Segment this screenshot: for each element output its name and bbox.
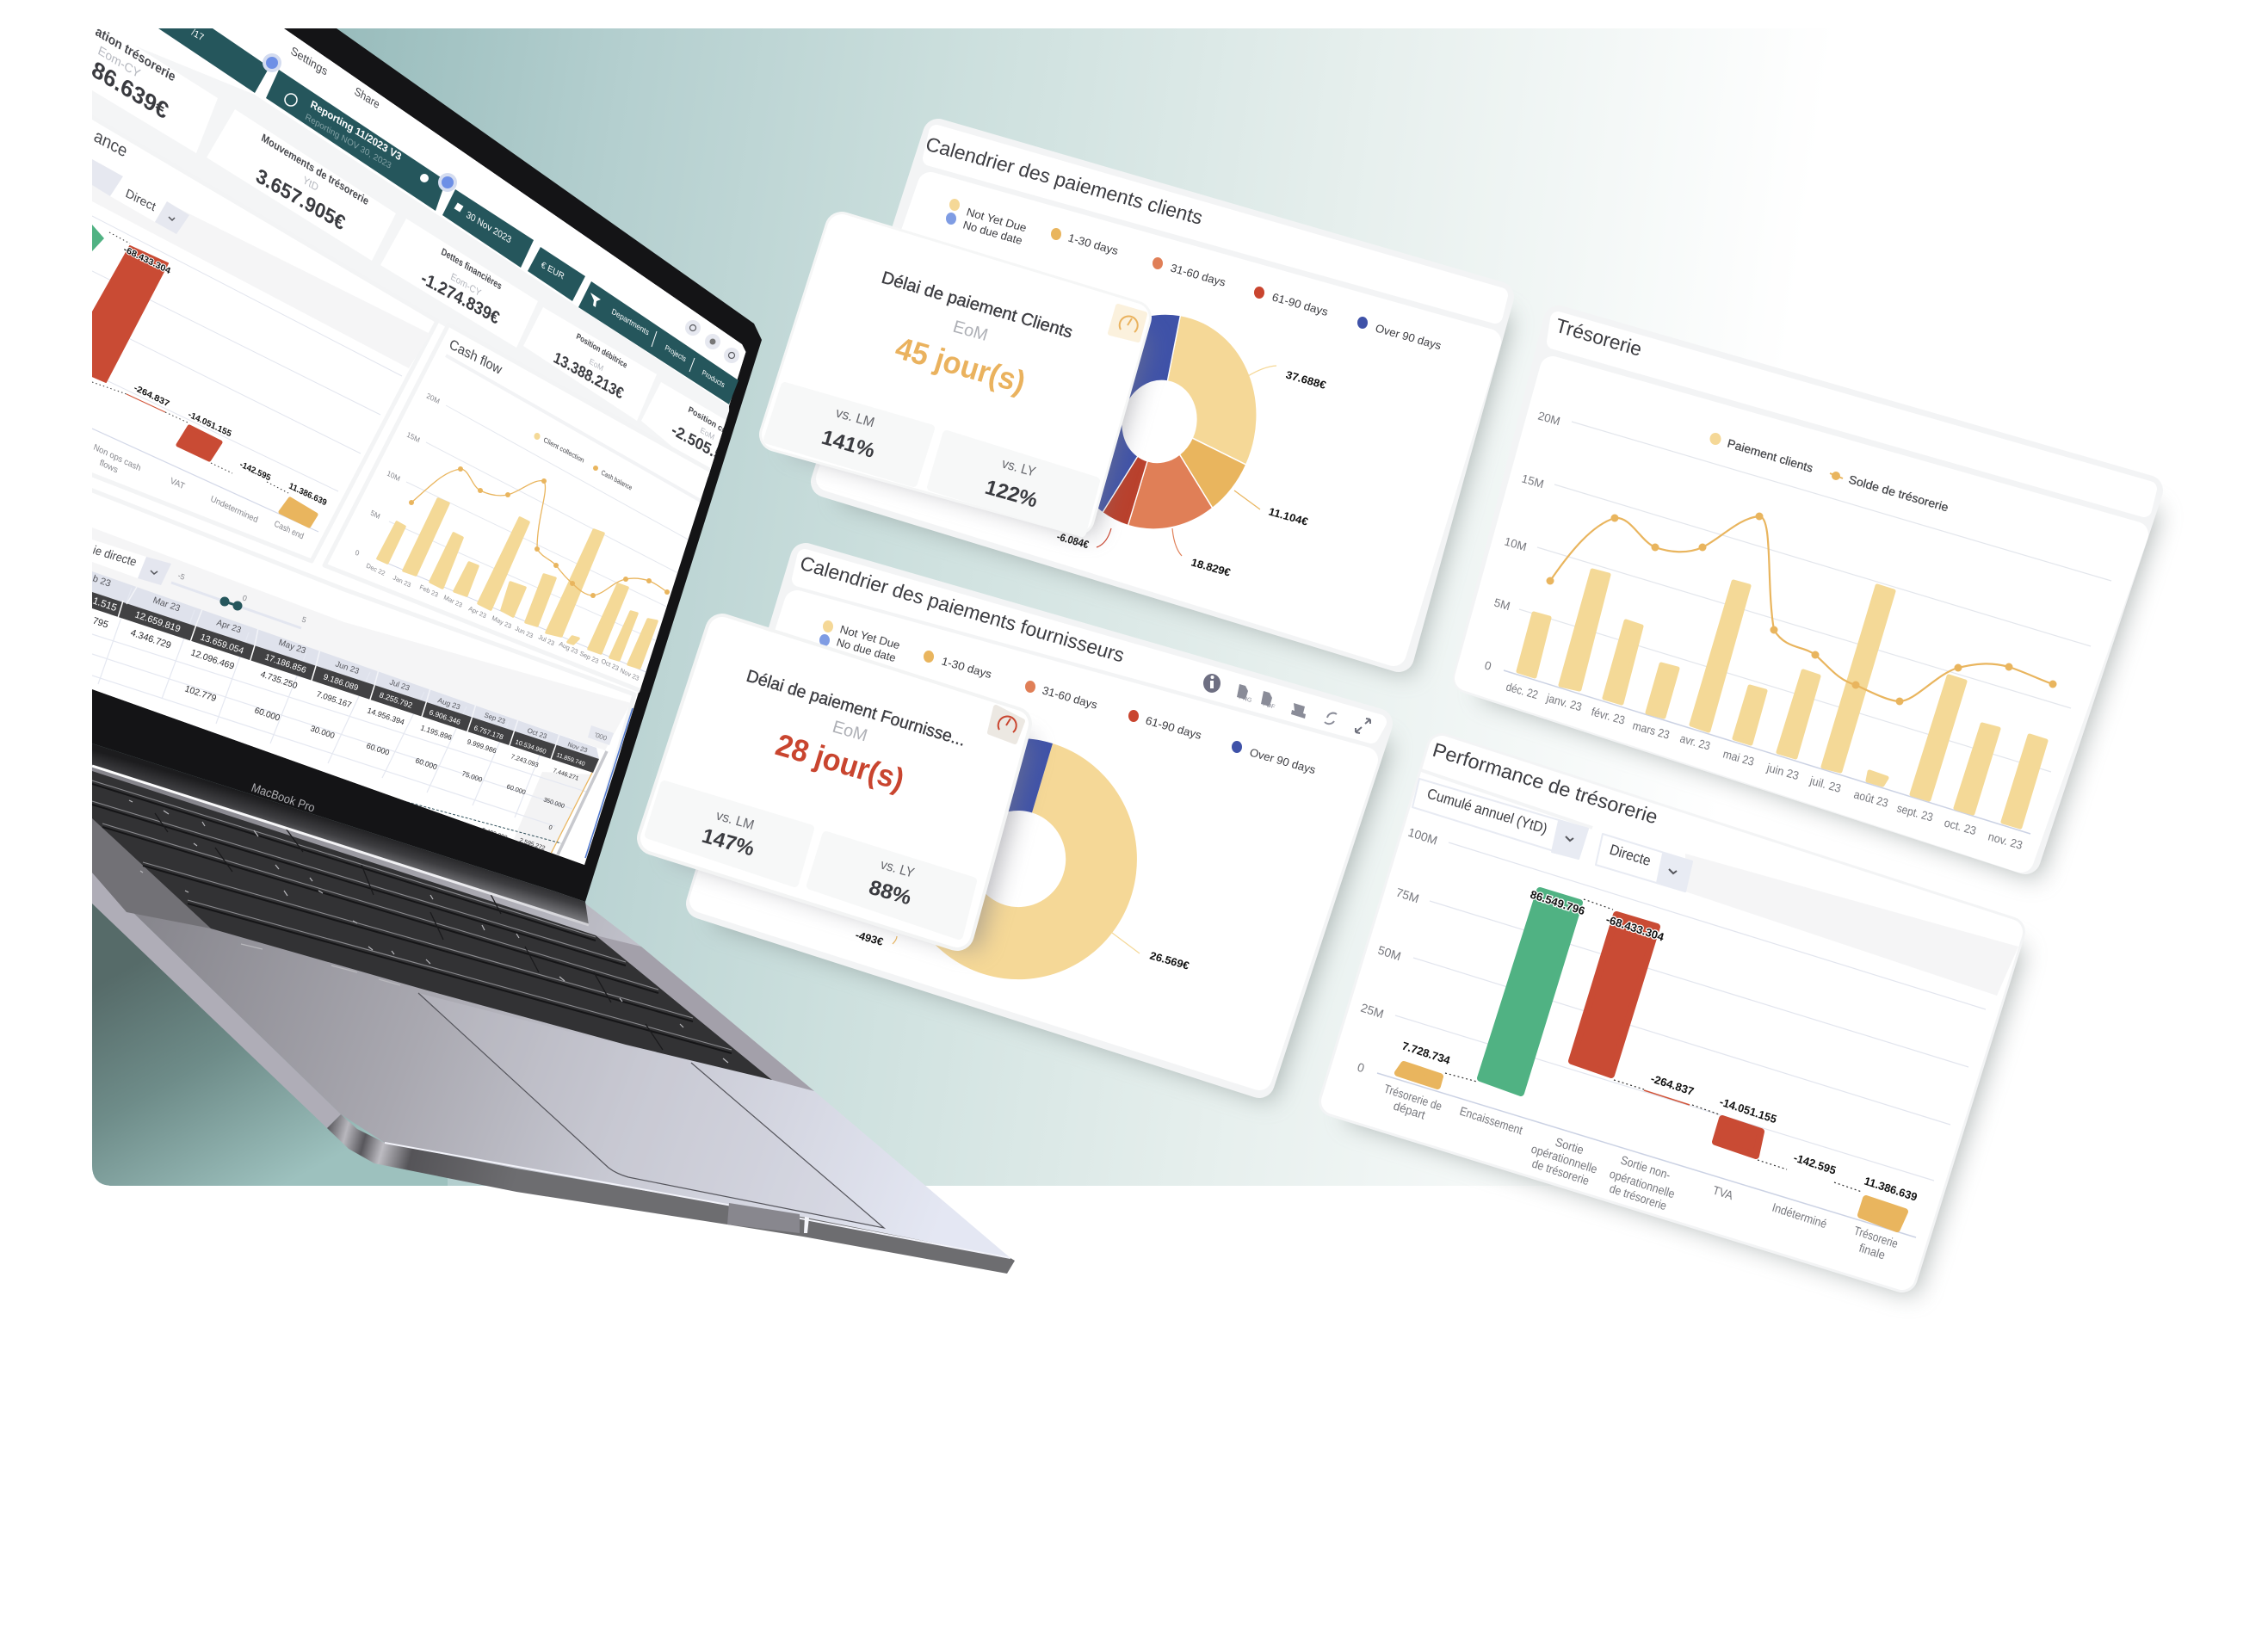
- data table in laptop: 75.000: [460, 769, 484, 784]
- data table in laptop: 795: [91, 616, 109, 631]
- data table in laptop: 2.492.092: [480, 827, 508, 842]
- dropdown: Directe: [1596, 834, 1692, 891]
- waterfall chart: de trésorerie: [1608, 1181, 1668, 1212]
- waterfall panel in laptop: -14.051.155: [187, 410, 233, 440]
- KPI card: mouvements: Mouvements de trésorerie: [260, 132, 370, 208]
- data table in laptop: May 23: [277, 638, 307, 657]
- KPI row background: [92, 28, 732, 490]
- data table in laptop: Oct 23: [526, 726, 548, 741]
- background dark corner: [92, 861, 448, 1186]
- donut labels: clients: -6.084€: [1055, 530, 1091, 551]
- line and bar chart: trésorerie: [1483, 409, 2111, 852]
- donut labels: clients: [1055, 366, 1327, 579]
- data table in laptop: Jun 23: [334, 659, 361, 676]
- infographic scene: [92, 28, 2169, 1305]
- cash flow chart in laptop: 5M: [369, 508, 381, 521]
- waterfall chart: 25M: [1359, 1001, 1386, 1021]
- stat: vs LM: [649, 785, 810, 883]
- period: EoM: EoM: [951, 318, 990, 345]
- cash flow chart in laptop: May 23: [491, 614, 512, 630]
- data table in laptop: 8.255.792: [378, 690, 414, 710]
- panel: Trésorerie: [1468, 314, 2160, 879]
- header pill: filters: Products: [701, 367, 726, 389]
- legend: fournisseurs: 31-60 days: [1041, 684, 1099, 712]
- data table in laptop: 13.659.054: [199, 632, 245, 657]
- line and bar chart: trésorerie: juin 23: [1764, 761, 1801, 782]
- toolbar icons: PNG: [1238, 694, 1252, 704]
- dropdown: Cumulé annuel: Cumulé annuel (YtD): [1425, 786, 1549, 837]
- line and bar chart: trésorerie: 0: [1483, 658, 1492, 673]
- line and bar chart: trésorerie: avr. 23: [1678, 731, 1712, 753]
- cash flow chart in laptop: Apr 23: [467, 604, 487, 620]
- donut labels: clients: 11.104€: [1267, 505, 1309, 528]
- data table in laptop: 60.000: [365, 741, 391, 757]
- data table in laptop: 9.186.089: [322, 672, 360, 693]
- legend: fournisseurs: 1-30 days: [940, 655, 994, 681]
- data table in laptop: 7.095.167: [315, 689, 353, 710]
- waterfall chart: départ: [1392, 1099, 1427, 1122]
- stat: vs LM: vs. LM: [714, 809, 756, 833]
- laptop bezel: [92, 28, 762, 902]
- waterfall chart: [1356, 825, 1986, 1262]
- waterfall panel in laptop: 11.386.639: [287, 481, 328, 509]
- cash flow chart in laptop: Nov 23: [619, 666, 640, 682]
- laptop base deck: [92, 757, 1010, 1258]
- data table in laptop: 6.757.178: [473, 724, 505, 742]
- legend: trésorerie: [1709, 433, 1950, 515]
- KPI card: position créditrice: -2.505.521€: [670, 421, 747, 477]
- waterfall panel in laptop: Cash end: [273, 519, 305, 542]
- cash flow chart in laptop: Mar 23: [442, 593, 463, 609]
- laptop front lip: [327, 1114, 1015, 1274]
- data table in laptop: 4.735.250: [259, 669, 299, 691]
- waterfall chart: Sortie: [1554, 1135, 1585, 1157]
- dropdown: Cumulé annuel: [1412, 779, 1588, 859]
- waterfall chart: 75M: [1394, 885, 1421, 905]
- line and bar chart: trésorerie: oct. 23: [1943, 816, 1978, 837]
- data table in laptop: 7.243.093: [510, 752, 540, 769]
- waterfall chart: Trésorerie de: [1382, 1082, 1443, 1114]
- panel: Performance de trésorerie: [1334, 738, 2024, 1296]
- KPI card: variation: Eom-CY: [96, 43, 143, 81]
- data table in laptop: Apr 23: [215, 618, 243, 635]
- legend: fournisseurs: [819, 620, 1318, 776]
- KPI card: position créditrice: EoM: [699, 425, 716, 441]
- legend: fournisseurs: No due date: [835, 636, 898, 664]
- waterfall chart: finale: [1857, 1241, 1887, 1262]
- data table in laptop: 17.186.856: [263, 652, 307, 676]
- stat: vs LY: 88%: [866, 876, 914, 910]
- donut labels: clients: 18.829€: [1190, 556, 1232, 579]
- heading: délai clients: Délai de paiement Clients: [880, 268, 1075, 342]
- menu labels: Settings: [289, 44, 330, 78]
- legend: fournisseurs: Not Yet Due: [838, 623, 902, 651]
- data table in laptop: 12.659.819: [133, 610, 182, 635]
- waterfall panel in laptop: Undetermined: [209, 494, 259, 525]
- line and bar chart: trésorerie: févr. 23: [1590, 705, 1626, 727]
- waterfall panel in laptop: Direct: [124, 186, 158, 213]
- dropdown: Directe: Directe: [1608, 842, 1653, 869]
- legend: fournisseurs: 61-90 days: [1144, 714, 1203, 742]
- KPI card: variation: ation trésorerie: [94, 24, 177, 85]
- legend: trésorerie: Paiement clients: [1726, 436, 1814, 475]
- cash flow chart in laptop: Dec 22: [365, 561, 386, 577]
- cash flow chart in laptop: Cash balance: [600, 468, 633, 492]
- waterfall chart: Trésorerie: [1852, 1224, 1900, 1250]
- legend: fournisseurs: Over 90 days: [1248, 746, 1318, 776]
- heading: Trésorerie: Trésorerie: [1554, 314, 1644, 361]
- waterfall chart: -68.433.304: [1604, 913, 1666, 944]
- waterfall chart: Encaissement: [1458, 1104, 1524, 1137]
- line and bar chart: trésorerie: 20M: [1536, 409, 1561, 428]
- KPI card: position débitrice: Position débitrice: [575, 331, 628, 371]
- waterfall chart: 100M: [1406, 825, 1439, 848]
- laptop left wedge shading: [92, 818, 211, 928]
- waterfall panel in laptop: Non ops cash: [92, 442, 142, 473]
- blue status dots: [263, 53, 457, 192]
- line and bar chart: trésorerie: 10M: [1503, 534, 1528, 553]
- legend: clients: 31-60 days: [1169, 262, 1227, 289]
- data table in laptop: Sep 23: [483, 711, 507, 725]
- laptop screen: [86, 24, 762, 867]
- KPI card: position débitrice: EoM: [588, 356, 605, 373]
- donut labels: fournisseurs: [854, 928, 1190, 972]
- grey band: [1685, 854, 2018, 996]
- data table in laptop: 2.595.272: [518, 837, 546, 852]
- header pill: version: /17: [190, 27, 205, 44]
- data table in laptop: 60.000: [253, 706, 281, 724]
- waterfall chart: -142.595: [1792, 1151, 1838, 1177]
- line and bar chart: trésorerie: mars 23: [1631, 719, 1671, 742]
- stat: vs LY: 122%: [982, 476, 1041, 512]
- cash flow chart in laptop: Oct 23: [600, 657, 620, 672]
- data table in laptop: Mar 23: [151, 595, 182, 614]
- header pill: currency: [528, 247, 585, 301]
- data table in laptop: 6.906.346: [428, 707, 462, 726]
- data table in laptop: 30.000: [309, 724, 336, 741]
- toolbar icons: [1203, 674, 1370, 733]
- donut chart: fournisseurs: [870, 708, 1166, 1009]
- KPI card: mouvements: 3.657.905€: [253, 163, 349, 235]
- cash flow chart in laptop: Jul 23: [537, 632, 555, 647]
- header pill: version: [158, 27, 269, 93]
- cash flow chart in laptop: [324, 324, 762, 691]
- legend: clients: Not Yet Due: [965, 206, 1029, 234]
- stat: vs LM: vs. LM: [834, 406, 876, 430]
- data table in laptop: 12.096.469: [189, 648, 236, 672]
- header pill: filters: Departments: [610, 306, 651, 337]
- legend: clients: No due date: [961, 219, 1024, 247]
- stat: vs LM: [768, 386, 930, 483]
- data table in laptop: 0: [241, 593, 248, 603]
- donut labels: fournisseurs: -493€: [854, 928, 885, 948]
- cash flow chart in laptop: Cash flow: [448, 337, 504, 378]
- data table in laptop: 5: [300, 614, 307, 625]
- line and bar chart: trésorerie: 15M: [1520, 472, 1545, 490]
- waterfall chart: 7.728.734: [1400, 1040, 1452, 1067]
- laptop: [86, 24, 1015, 1274]
- data table in laptop: -5: [176, 571, 186, 582]
- line and bar chart: trésorerie: mai 23: [1721, 747, 1756, 768]
- line and bar chart: trésorerie: juil. 23: [1808, 774, 1843, 795]
- icon: gauge red: [990, 707, 1023, 742]
- data table in laptop: Aug 23: [436, 695, 461, 712]
- stat: vs LY: vs. LY: [1000, 457, 1037, 480]
- data table in laptop: Jul 23: [388, 677, 411, 693]
- legend: clients: Over 90 days: [1374, 322, 1443, 352]
- line and bar chart: trésorerie: nov. 23: [1987, 830, 2024, 852]
- laptop front notch: [727, 1203, 809, 1233]
- header pill: currency: € EUR: [540, 260, 565, 282]
- waterfall panel in laptop: -264.837: [133, 383, 171, 410]
- data table in laptop: 102.779: [183, 684, 218, 704]
- menu labels: [291, 47, 379, 108]
- laptop left bevel: [92, 873, 341, 1128]
- cash flow chart in laptop: 20M: [425, 391, 441, 406]
- card: Délai de paiement Clients: [768, 229, 1150, 535]
- data table in laptop: Nov 23: [566, 740, 589, 755]
- stat: vs LM: 141%: [819, 426, 878, 463]
- lip highlight: [385, 1143, 1010, 1258]
- legend: trésorerie: Solde de trésorerie: [1847, 472, 1950, 515]
- header action icons: [685, 320, 739, 363]
- data table in laptop: 0: [547, 824, 553, 831]
- cash flow chart in laptop: Client collection: [542, 435, 585, 465]
- cash flow chart in laptop: Jan 23: [392, 573, 412, 589]
- keyboard side strip: [596, 935, 814, 1091]
- data table in laptop: b 23: [91, 574, 112, 589]
- stat: vs LY: [811, 836, 973, 935]
- line and bar chart: trésorerie: déc. 22: [1505, 680, 1540, 701]
- waterfall chart: -14.051.155: [1718, 1095, 1778, 1126]
- waterfall chart: opérationnelle: [1530, 1142, 1599, 1176]
- waterfall panel in laptop: VAT: [169, 476, 186, 491]
- legend: clients: 1-30 days: [1066, 231, 1121, 257]
- icon: gauge orange: [1110, 306, 1145, 340]
- header pill: reporting: Reporting NOV 30, 2023: [304, 112, 392, 171]
- panel: Calendrier des paiements clients: [826, 133, 1511, 676]
- data table in laptop: 9.999.986: [466, 737, 498, 756]
- waterfall panel in laptop: ance: [91, 126, 130, 162]
- heading: délai fournisseurs: Délai de paiement Fournisse...: [745, 667, 967, 750]
- data table in laptop: 1.515: [91, 596, 118, 614]
- cash flow chart in laptop: Sep 23: [578, 649, 600, 665]
- legend: clients: [946, 199, 1443, 352]
- header pill: date: 30 Nov 2023: [465, 209, 512, 246]
- waterfall panel in laptop: -142.595: [238, 460, 272, 484]
- data table in laptop: 60.000: [505, 782, 527, 796]
- donut labels: clients: 37.688€: [1284, 368, 1327, 392]
- cash flow chart in laptop: Feb 23: [418, 583, 439, 599]
- waterfall chart: de trésorerie: [1530, 1157, 1591, 1188]
- waterfall panel in laptop: [86, 114, 437, 561]
- data table in laptop: ie directe: [91, 543, 139, 569]
- cash flow chart in laptop: 15M: [405, 429, 421, 445]
- data table in laptop: [86, 488, 634, 867]
- donut labels: fournisseurs: 26.569€: [1148, 949, 1190, 972]
- data table in laptop: 7.446.271: [552, 768, 579, 782]
- KPI card: dettes: [380, 219, 538, 348]
- line and bar chart: trésorerie: 5M: [1492, 595, 1511, 613]
- waterfall chart: 0: [1356, 1060, 1366, 1075]
- KPI card: dettes: -1.274.839€: [418, 268, 502, 329]
- menu labels: Share: [353, 84, 381, 111]
- panel: Calendrier des paiements fournisseurs: [701, 552, 1391, 1101]
- header pill: reporting: Reporting 11/2023 V3: [309, 98, 403, 163]
- data table in laptop: 350.000: [542, 797, 565, 810]
- waterfall chart: 11.386.639: [1863, 1175, 1919, 1204]
- toolbar icons: PDF: [1262, 701, 1276, 711]
- KPI card: position créditrice: Position créditrice: [687, 404, 751, 450]
- stat: vs LY: vs. LY: [879, 858, 916, 881]
- legend: clients: 61-90 days: [1270, 291, 1330, 318]
- waterfall chart: -264.837: [1649, 1072, 1696, 1098]
- line and bar chart: trésorerie: janv. 23: [1544, 691, 1583, 713]
- donut chart: clients: [1036, 289, 1283, 554]
- card: Délai de paiement Fournisseurs: [649, 631, 1033, 951]
- heading: Calendrier fournisseurs: Calendrier des paiements fournisseurs: [798, 552, 1127, 666]
- KPI card: mouvements: YtD: [301, 174, 320, 194]
- cash flow chart in laptop: 0: [354, 547, 361, 558]
- waterfall panel in laptop: flows: [98, 458, 119, 476]
- header pill: date: [442, 189, 534, 268]
- cash flow chart in laptop: Aug 23: [558, 639, 579, 656]
- KPI card: position débitrice: [523, 307, 657, 421]
- data table in laptop: 11.859.740: [555, 752, 585, 768]
- stat: vs LY: [931, 435, 1096, 533]
- data table in laptop: 1.195.896: [419, 723, 454, 742]
- top white strip: [284, 28, 745, 406]
- value: 45 jours: 45 jour(s): [892, 330, 1029, 400]
- KPI card: position débitrice: 13.388.213€: [552, 349, 626, 403]
- waterfall chart: Sortie non-: [1619, 1153, 1672, 1182]
- header pill: filters: Projects: [664, 342, 688, 363]
- KPI card: variation: 86.639€: [89, 55, 171, 125]
- waterfall chart: TVA: [1711, 1183, 1735, 1202]
- heading: Calendrier clients: Calendrier des paiements clients: [924, 133, 1205, 229]
- data table in laptop: 14.956.394: [366, 706, 405, 726]
- waterfall chart: opérationnelle: [1608, 1167, 1677, 1200]
- line and bar chart: trésorerie: sept. 23: [1895, 801, 1934, 824]
- KPI card: mouvements: [207, 109, 396, 261]
- line and bar chart: trésorerie: août 23: [1852, 787, 1889, 810]
- deck highlight line: [92, 766, 589, 925]
- waterfall chart: Indéterminé: [1771, 1200, 1829, 1231]
- data table in laptop: 60.000: [414, 756, 439, 771]
- data table in laptop: 4.346.729: [129, 628, 172, 651]
- KPI card: position créditrice: [641, 382, 751, 482]
- KPI card: variation: [89, 24, 218, 153]
- stat: vs LM: 147%: [699, 824, 757, 861]
- data table in laptop: '000: [593, 731, 609, 743]
- header pill: filters: [578, 281, 738, 404]
- cash flow chart in laptop: 10M: [386, 468, 401, 484]
- data table in laptop: 10.534.960: [514, 737, 547, 756]
- KPI card: dettes: Dettes financières: [440, 246, 503, 292]
- heading: Performance: Performance de trésorerie: [1431, 738, 1660, 828]
- waterfall chart: 86.549.796: [1529, 888, 1586, 917]
- hinge with logo: MacBook Pro: [250, 780, 317, 815]
- header pill: reporting: [266, 70, 446, 211]
- hinge with logo: [92, 743, 589, 925]
- keyboard: [92, 771, 772, 1080]
- value: 28 jours: 28 jour(s): [772, 726, 908, 797]
- waterfall panel in laptop: -68.433.304: [122, 244, 172, 276]
- waterfall chart: 50M: [1376, 943, 1403, 963]
- trackpad: [418, 993, 884, 1228]
- KPI card: dettes: Eom-CY: [449, 271, 483, 299]
- background gradient panel: [92, 28, 2268, 1186]
- period: EoM: EoM: [831, 718, 869, 745]
- cash flow chart in laptop: Jun 23: [514, 624, 535, 640]
